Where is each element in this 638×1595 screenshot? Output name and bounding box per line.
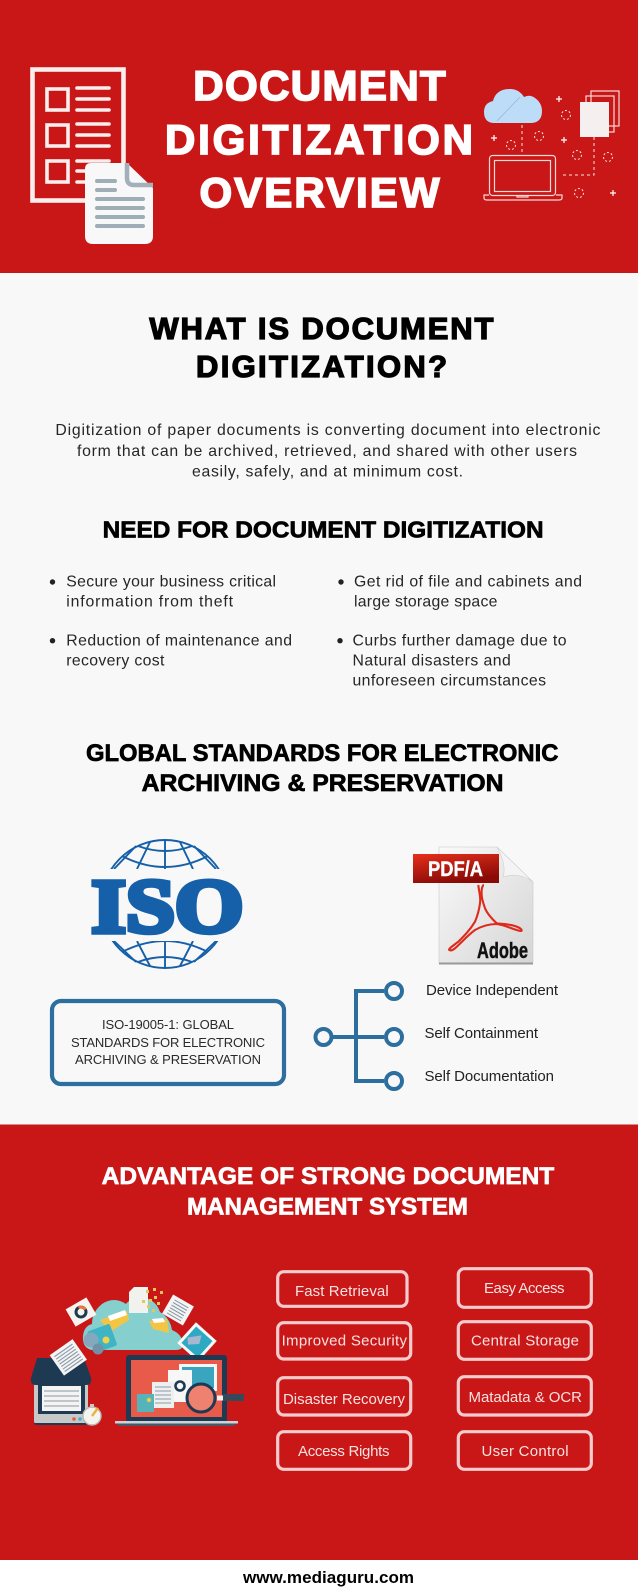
button: Matadata & OCR: [458, 1377, 591, 1415]
heading: global standards: GLOBAL STANDARDS FOR ELECTRONIC: [86, 740, 558, 767]
text block: definition: [55, 422, 600, 480]
icon: PDF/A Adobe document: Adobe: [477, 938, 528, 963]
heading: need for document digitization: NEED FOR DOCUMENT DIGITIZATION: [103, 517, 544, 543]
title: DIGITIZATION: [165, 116, 473, 163]
button: Central Storage: Central Storage: [471, 1333, 579, 1350]
button: Matadata & OCR: Matadata & OCR: [468, 1389, 582, 1406]
button: Access Rights: Access Rights: [298, 1443, 390, 1460]
button: Disaster Recovery: [278, 1378, 411, 1415]
bullet: maintenance cost: Reduction of maintenance and: [66, 633, 292, 650]
panel: footer: [0, 1560, 638, 1595]
text block: definition: easily, safely, and at minimum cost.: [192, 464, 463, 480]
icon: cloud, laptop and documents: [484, 89, 619, 200]
button: Disaster Recovery: Disaster Recovery: [283, 1391, 406, 1408]
diagram: PDF/A properties tree: Device Independent: [426, 982, 559, 999]
callout: ISO-19005-1 box: ARCHIVING & PRESERVATION: [75, 1052, 261, 1067]
top document with pixels: [129, 1287, 163, 1313]
list: needs: [50, 574, 582, 690]
button: Easy Access: [458, 1269, 591, 1307]
button: Fast Retrieval: [278, 1272, 407, 1306]
icon: ISO logo: ISO: [92, 865, 244, 949]
footer: website: www.mediaguru.com: [242, 1568, 414, 1587]
photo sheet: [177, 1322, 217, 1362]
scanner: [31, 1358, 91, 1425]
callout: ISO-19005-1 box: ISO-19005-1: GLOBAL: [102, 1017, 234, 1032]
button: User Control: User Control: [482, 1443, 569, 1460]
title: OVERVIEW: [200, 169, 440, 216]
icon: PDF/A Adobe document: PDF/A: [428, 858, 483, 881]
button: User Control: [458, 1432, 591, 1469]
panel: header band: [0, 0, 638, 273]
bullet: storage space: Get rid of file and cabinets and: [354, 574, 582, 591]
bullet: maintenance cost: recovery cost: [66, 653, 165, 670]
stopwatch: [83, 1404, 101, 1425]
heading: advantage of strong DMS: [102, 1163, 555, 1220]
icon: PDF/A Adobe document: [413, 847, 533, 964]
laptop: [115, 1355, 244, 1426]
bullet: disasters: [337, 633, 567, 690]
title: DOCUMENT: [193, 62, 446, 109]
bullet: secure information: information from theft: [66, 594, 234, 611]
icon: ISO logo: [92, 840, 244, 968]
bullet: secure information: Secure your business critical: [66, 574, 276, 591]
bullet: storage space: [338, 574, 582, 611]
button: Improved Security: Improved Security: [282, 1333, 408, 1350]
text block: definition: Digitization of paper documents is converting document into electronic: [55, 422, 600, 439]
panel: advantages band: [0, 1124, 638, 1560]
bullet: disasters: Natural disasters and: [352, 653, 511, 670]
folders: [100, 1310, 169, 1333]
button: Easy Access: Easy Access: [484, 1280, 564, 1297]
striped sheet: [162, 1294, 194, 1326]
chart sheet: [66, 1297, 96, 1327]
diagram: PDF/A properties tree: Self Documentation: [424, 1068, 554, 1085]
heading: global standards: ARCHIVING & PRESERVATION: [142, 770, 504, 797]
text block: definition: form that can be archived, retrieved, and shared with other users: [77, 443, 577, 460]
heading: advantage of strong DMS: MANAGEMENT SYSTEM: [187, 1193, 468, 1220]
bullet: secure information: [50, 574, 276, 611]
button: Central Storage: [458, 1322, 591, 1359]
bullet: disasters: Curbs further damage due to: [352, 633, 567, 650]
heading: advantage of strong DMS: ADVANTAGE OF STRONG DOCUMENT: [102, 1163, 555, 1190]
left striped sheet: [50, 1339, 87, 1376]
icon: checklist document: [32, 70, 153, 244]
heading: what is document digitization: WHAT IS DOCUMENT: [149, 311, 493, 346]
button: Improved Security: [278, 1323, 411, 1359]
bullet: maintenance cost: [50, 633, 292, 670]
callout: ISO-19005-1 box: [52, 1001, 284, 1084]
heading: what is document digitization: DIGITIZATION?: [196, 349, 447, 384]
diagram: PDF/A properties tree: Self Containment: [424, 1025, 539, 1042]
heading: global standards: [86, 740, 558, 797]
bullet: storage space: large storage space: [354, 594, 498, 611]
button: Access Rights: [278, 1432, 411, 1469]
card: [84, 1324, 117, 1354]
button: Fast Retrieval: Fast Retrieval: [295, 1283, 389, 1300]
callout: ISO-19005-1 box: STANDARDS FOR ELECTRONIC: [71, 1035, 265, 1050]
heading: what is document digitization: [149, 311, 493, 384]
bullet: disasters: unforeseen circumstances: [352, 673, 546, 690]
title: [165, 62, 473, 216]
illustration: scanner, cloud and laptop: [31, 1287, 244, 1426]
diagram: PDF/A properties tree: [316, 982, 559, 1089]
